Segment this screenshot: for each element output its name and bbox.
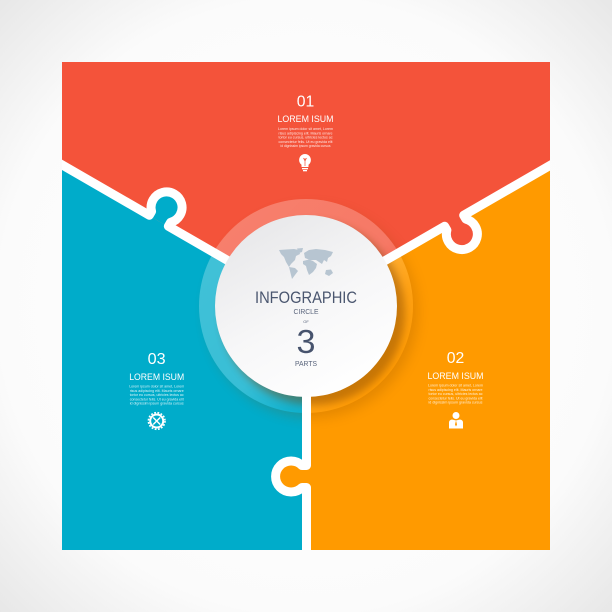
icon: gear xyxy=(148,413,165,429)
text block 03: 03 xyxy=(148,351,166,368)
text block 03: id dignissim ipsum gravida cursus xyxy=(130,401,184,406)
icon: light bulb xyxy=(299,154,311,171)
text block 02 xyxy=(428,350,484,405)
translucent ring xyxy=(199,199,413,413)
center disc xyxy=(215,215,397,397)
dividers xyxy=(62,160,550,550)
number: 3: 3 xyxy=(296,323,316,360)
puzzle knob: red into orange xyxy=(448,218,473,246)
label: parts: PARTS xyxy=(295,359,317,368)
title: infographic: INFOGRAPHIC xyxy=(255,289,357,307)
subtitle: circle: CIRCLE xyxy=(294,307,318,316)
text block 02: tortor eu cursus, ultricies lectus ac xyxy=(428,391,482,396)
text block 02: consectetur felis. Ut eu gravida elit xyxy=(428,395,483,400)
divider: left xyxy=(62,160,230,264)
panel: section 03 blue xyxy=(62,166,306,550)
text block 03 xyxy=(129,351,185,406)
panel: section 01 red xyxy=(62,62,550,249)
icon: business person xyxy=(449,412,463,428)
disc shadow xyxy=(221,221,405,405)
text block 03: tortor eu cursus, ultricies lectus ac xyxy=(130,392,184,397)
puzzle square colours xyxy=(62,62,550,550)
text block 03: consectetur felis. Ut eu gravida elit xyxy=(130,396,184,401)
divider: bottom xyxy=(271,396,311,550)
ring shadow xyxy=(206,206,418,418)
text block 01: Lorem ipsum dolor sit amet, Lorem xyxy=(278,126,334,131)
text block 01 xyxy=(278,94,334,148)
text block 02: Lorem ipsum dolor sit amet, Lorem xyxy=(428,382,484,388)
text block 03: LOREM ISUM xyxy=(129,372,184,382)
text block 02: 02 xyxy=(447,350,464,367)
text block 01: LOREM ISUM xyxy=(278,114,334,124)
icon: world map xyxy=(279,248,333,279)
text block 01: id dignissim ipsum gravida cursus xyxy=(280,143,330,148)
puzzle knob: blue into red xyxy=(153,196,178,224)
text block 02: LOREM ISUM xyxy=(428,371,484,381)
text block 01: 01 xyxy=(297,94,314,110)
text block 03: Lorem ipsum dolor sit amet, Lorem xyxy=(129,384,185,388)
label: of: OF xyxy=(303,319,309,324)
divider: right xyxy=(382,160,550,265)
puzzle knob: orange into blue xyxy=(280,466,306,488)
text block 01: tortor eu cursus, ultricies lectus ac xyxy=(278,135,332,140)
text block 02: risus adipiscing elit. Mauris ornare xyxy=(428,387,483,392)
panel: section 02 orange xyxy=(306,166,550,550)
text block 01: consectetur felis. Ut eu gravida elit xyxy=(278,139,333,144)
text block 03: risus adipiscing elit. Mauris ornare xyxy=(130,388,184,393)
text block 02: id dignissim ipsum gravida cursus xyxy=(428,400,482,405)
text block 01: risus adipiscing elit. Mauris ornare xyxy=(278,130,333,135)
